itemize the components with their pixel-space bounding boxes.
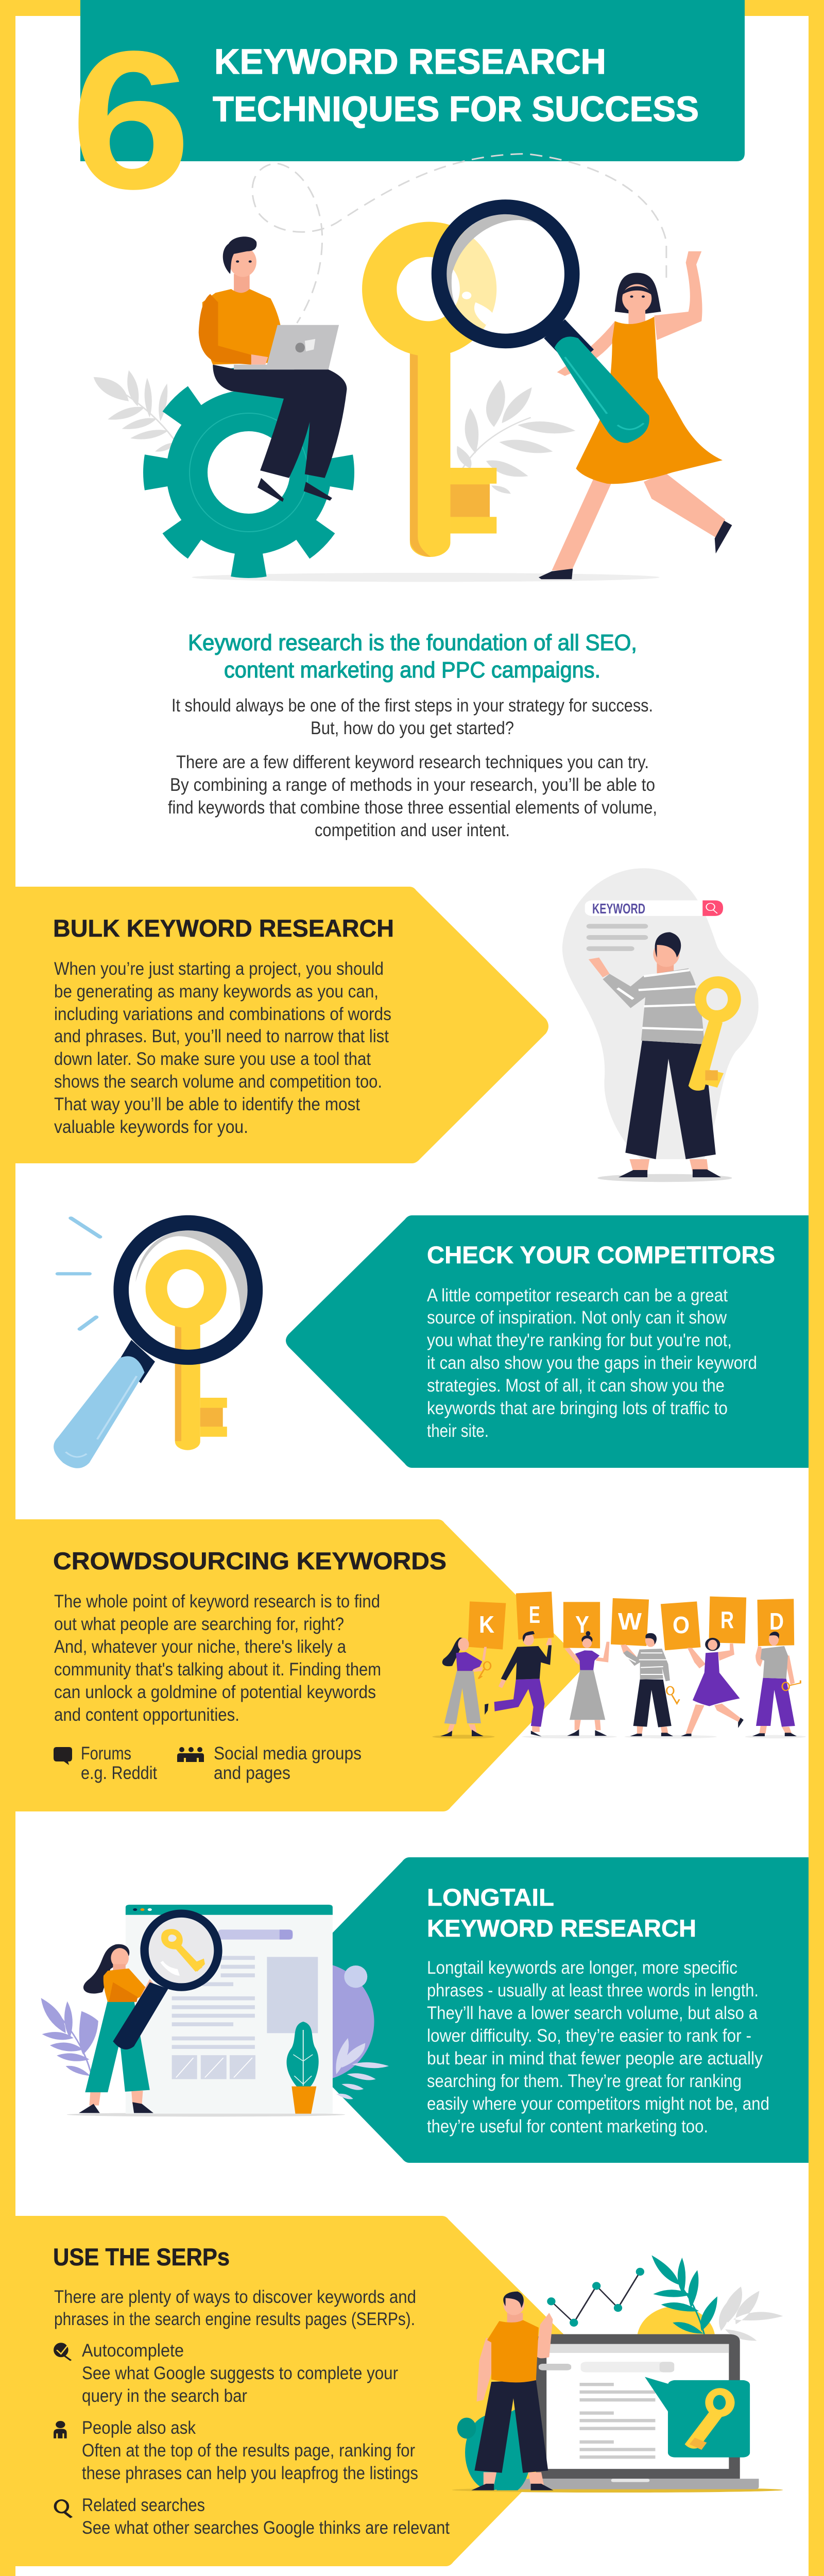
intro paragraph two: By combining a range of methods in your research, you’ll be able to bbox=[170, 775, 655, 795]
body text: They’ll have a lower search volume, but also a bbox=[427, 2003, 758, 2023]
illustration: magnifier over key bbox=[54, 1215, 263, 1468]
body text bbox=[54, 1591, 381, 1725]
people also ask item: People also ask bbox=[82, 2418, 196, 2438]
intro text: phrases in the search engine results pages (SERPs). bbox=[54, 2309, 415, 2329]
people also ask item: these phrases can help you leapfrog the listings bbox=[82, 2463, 418, 2483]
illustration: man holding key bbox=[562, 868, 759, 1182]
body text: community that's talking about it. Finding them bbox=[54, 1659, 381, 1680]
intro text block bbox=[168, 630, 657, 840]
sign letters bbox=[479, 1601, 784, 1638]
body text: A little competitor research can be a great bbox=[427, 1285, 728, 1306]
body text: but bear in mind that fewer people are actually bbox=[427, 2048, 763, 2069]
intro paragraph two: find keywords that combine those three essential elements of volume, bbox=[168, 798, 657, 818]
sign letters: O bbox=[673, 1612, 690, 1638]
heading: CROWDSOURCING KEYWORDS bbox=[53, 1547, 447, 1574]
people also ask item: Often at the top of the results page, ranking for bbox=[82, 2441, 415, 2461]
body text: can unlock a goldmine of potential keywords bbox=[54, 1682, 376, 1702]
body text: it can also show you the gaps in their keyword bbox=[427, 1353, 757, 1373]
title: TECHNIQUES FOR SUCCESS bbox=[213, 89, 699, 129]
sign letters: W bbox=[618, 1608, 642, 1635]
body text bbox=[427, 1958, 769, 2137]
illustration: man holding key: KEYWORD bbox=[592, 901, 645, 917]
intro paragraph one: But, how do you get started? bbox=[311, 718, 514, 738]
body text: searching for them. They’re great for ranking bbox=[427, 2071, 742, 2091]
body text: Longtail keywords are longer, more specific bbox=[427, 1958, 737, 1978]
body text: lower difficulty. So, they’re easier to rank for - bbox=[427, 2026, 751, 2046]
woman in orange dress bbox=[539, 251, 732, 579]
forums label bbox=[81, 1743, 157, 1783]
intro paragraph one bbox=[171, 696, 653, 738]
intro paragraph two: There are a few different keyword research techniques you can try. bbox=[176, 752, 649, 772]
intro paragraph one: It should always be one of the first steps in your strategy for success. bbox=[171, 696, 653, 716]
icon: group of people bbox=[177, 1747, 204, 1762]
panel: bulk keyword research bbox=[15, 868, 759, 1182]
social media groups label: Social media groups bbox=[214, 1743, 362, 1764]
hero illustration bbox=[94, 154, 732, 582]
autocomplete item: See what Google suggests to complete your bbox=[82, 2363, 398, 2383]
heading: KEYWORD RESEARCH bbox=[427, 1914, 696, 1942]
body text: you what they're ranking for but you're not, bbox=[427, 1330, 732, 1350]
header banner bbox=[71, 0, 745, 230]
heading: LONGTAIL bbox=[427, 1884, 554, 1911]
illustration: man with laptop and key bubble bbox=[452, 2256, 783, 2493]
icon: search bbox=[55, 2500, 72, 2518]
body text bbox=[427, 1285, 757, 1441]
autocomplete item: Autocomplete bbox=[82, 2341, 184, 2361]
body text: and phrases. But, you’ll need to narrow that list bbox=[54, 1026, 389, 1046]
sign letters: R bbox=[720, 1606, 734, 1633]
body text: That way you’ll be able to identify the most bbox=[54, 1094, 360, 1114]
heading: USE THE SERPs bbox=[53, 2243, 230, 2270]
body text: shows the search volume and competition too. bbox=[54, 1072, 382, 1092]
heading: BULK KEYWORD RESEARCH bbox=[53, 914, 394, 942]
illustration: woman with web page and magnifier bbox=[41, 1905, 389, 2116]
man with laptop bbox=[199, 236, 347, 502]
body text: easily where your competitors might not be, and bbox=[427, 2094, 769, 2114]
icon: teal gear bbox=[155, 379, 342, 566]
heading: CHECK YOUR COMPETITORS bbox=[427, 1241, 775, 1268]
intro headline: content marketing and PPC campaigns. bbox=[224, 657, 600, 683]
intro text bbox=[54, 2287, 416, 2329]
icon: magnifying glass bbox=[432, 199, 649, 443]
body text: out what people are searching for, right? bbox=[54, 1614, 344, 1634]
intro paragraph two: competition and user intent. bbox=[315, 820, 510, 840]
icon: forum bubble bbox=[54, 1747, 72, 1765]
autocomplete item bbox=[82, 2341, 398, 2406]
forums label: Forums bbox=[81, 1743, 131, 1764]
heading bbox=[427, 1884, 696, 1942]
related searches item: See what other searches Google thinks are relevant bbox=[82, 2518, 450, 2538]
panel: check your competitors bbox=[54, 1215, 809, 1468]
body text: and content opportunities. bbox=[54, 1705, 239, 1725]
sign letters: D bbox=[769, 1608, 784, 1635]
sign letters: Y bbox=[575, 1611, 589, 1638]
body text: phrases - usually at least three words in length. bbox=[427, 1980, 759, 2001]
panel: longtail keyword research bbox=[41, 1857, 809, 2163]
panel: crowdsourcing keywords bbox=[15, 1519, 806, 1811]
people also ask item bbox=[82, 2418, 418, 2483]
sign letters: E bbox=[529, 1601, 540, 1628]
related searches item: Related searches bbox=[82, 2495, 205, 2515]
forums label: e.g. Reddit bbox=[81, 1763, 157, 1783]
intro paragraph two bbox=[168, 752, 657, 840]
body text: keywords that are bringing lots of traffic to bbox=[427, 1398, 728, 1418]
body text: When you’re just starting a project, you should bbox=[54, 959, 384, 979]
body text: strategies. Most of all, it can show you the bbox=[427, 1376, 725, 1396]
body text: And, whatever your niche, there's likely a bbox=[54, 1637, 346, 1657]
intro headline: Keyword research is the foundation of all SEO, bbox=[188, 630, 637, 655]
social media groups label: and pages bbox=[214, 1763, 290, 1783]
panel: use the SERPs bbox=[15, 2216, 783, 2566]
body text: source of inspiration. Not only can it show bbox=[427, 1308, 727, 1328]
intro headline bbox=[188, 630, 637, 683]
body text: their site. bbox=[427, 1421, 489, 1441]
body text: down later. So make sure you use a tool that bbox=[54, 1049, 371, 1069]
body text: be generating as many keywords as you can, bbox=[54, 981, 379, 1002]
body text: The whole point of keyword research is to find bbox=[54, 1591, 380, 1612]
icon: person bbox=[54, 2421, 67, 2438]
intro text: There are plenty of ways to discover keywords and bbox=[54, 2287, 416, 2307]
big number six: 6 bbox=[71, 10, 191, 230]
icon: autocomplete bbox=[54, 2343, 71, 2361]
body text: valuable keywords for you. bbox=[54, 1117, 248, 1137]
title: KEYWORD RESEARCH bbox=[214, 42, 606, 81]
body text: they’re useful for content marketing too. bbox=[427, 2116, 708, 2137]
body text bbox=[54, 959, 391, 1137]
icon: large key bbox=[362, 222, 496, 557]
title bbox=[213, 42, 699, 129]
social media groups label bbox=[214, 1743, 362, 1783]
body text: including variations and combinations of words bbox=[54, 1004, 391, 1024]
autocomplete item: query in the search bar bbox=[82, 2386, 247, 2406]
illustration: people holding keyword signs bbox=[432, 1591, 806, 1739]
sign letters: K bbox=[479, 1611, 494, 1638]
related searches item bbox=[82, 2495, 450, 2538]
